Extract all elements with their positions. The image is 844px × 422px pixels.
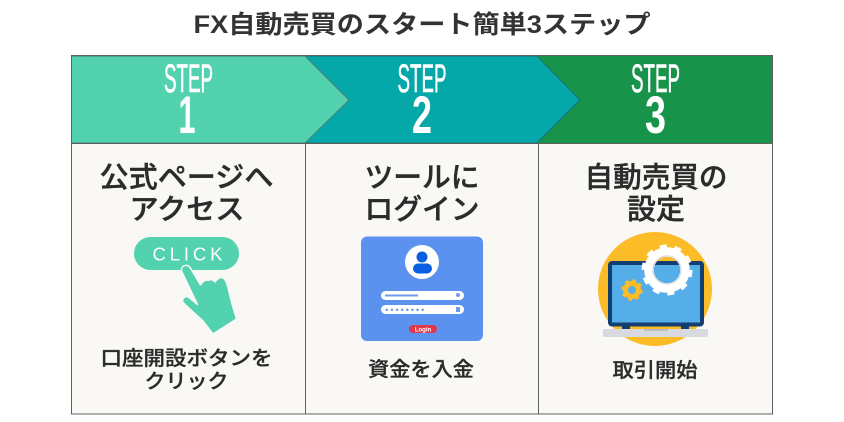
panel: step 1 header arrow bbox=[72, 56, 349, 145]
text: step 3 heading: 設定 bbox=[627, 194, 685, 226]
text: step 1 caption bbox=[100, 347, 272, 393]
panel: body background bbox=[72, 143, 772, 414]
text: step 1 heading bbox=[100, 162, 274, 226]
table frame bbox=[72, 56, 772, 414]
text: step 1 caption: 口座開設ボタンを bbox=[100, 347, 272, 370]
text: step 3 heading bbox=[584, 162, 728, 226]
icon: click button and hand: CLICK bbox=[152, 244, 223, 264]
heading: step 3 number: 3 bbox=[645, 86, 666, 145]
text: step 2 heading: ログイン bbox=[364, 194, 480, 226]
text: step 1 caption: クリック bbox=[144, 370, 228, 393]
icon: small orange gear bbox=[623, 281, 641, 299]
icon: login panel: Login bbox=[415, 328, 431, 334]
panel: step 2 header arrow: STEP bbox=[398, 57, 446, 101]
heading: step 2 number: 2 bbox=[412, 86, 432, 145]
icon: login panel bbox=[361, 236, 483, 341]
text: step 2 heading bbox=[364, 162, 480, 226]
icon: large white gear bbox=[644, 246, 690, 294]
icon: laptop with gears bbox=[598, 232, 712, 346]
panel: step 3 header bbox=[537, 56, 772, 145]
panel: step 3 header: STEP bbox=[631, 57, 680, 101]
text: step 2 heading: ツールに bbox=[364, 162, 480, 194]
text: step 3 heading: 自動売買の bbox=[584, 162, 728, 194]
text: step 1 heading: 公式ページへ bbox=[100, 162, 274, 194]
text: step 3 caption: 取引開始 bbox=[612, 359, 698, 382]
panel: step 2 header arrow bbox=[305, 56, 580, 145]
icon: login panel: ●●●●●●●● bbox=[385, 308, 426, 314]
text: step 2 caption: 資金を入金 bbox=[368, 358, 474, 381]
text: step 1 heading: アクセス bbox=[130, 194, 244, 226]
heading: step 1 number: 1 bbox=[178, 86, 196, 145]
icon: click button and hand bbox=[134, 237, 239, 334]
title: FX自動売買のスタート簡単3ステップ bbox=[194, 11, 650, 39]
panel: step 1 header arrow: STEP bbox=[164, 57, 213, 101]
